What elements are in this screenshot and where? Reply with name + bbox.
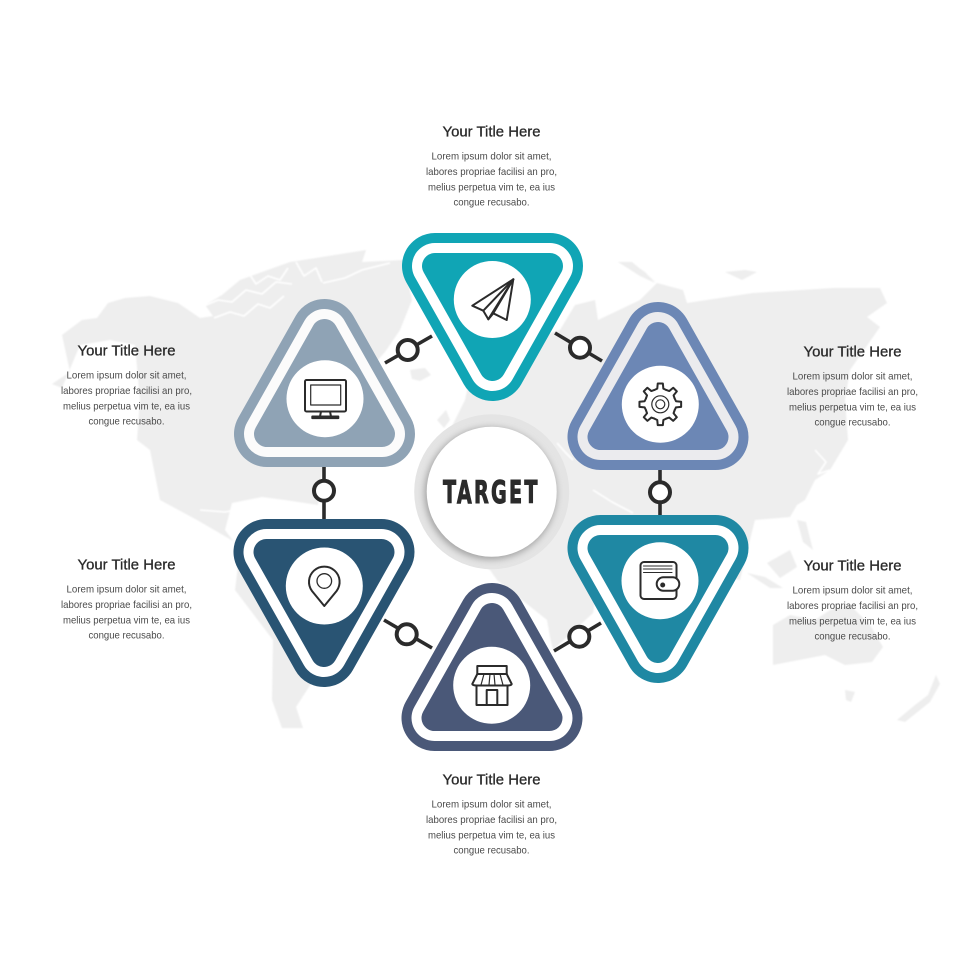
text block: upper left: Lorem ipsum dolor sit amet, bbox=[66, 370, 186, 382]
text block: upper right: Your Title Here bbox=[804, 344, 902, 361]
text block: lower right: melius perpetua vim te, ea ius bbox=[789, 616, 916, 628]
connector: gear to wallet bbox=[650, 468, 670, 516]
text block: bottom: melius perpetua vim te, ea ius bbox=[428, 830, 555, 842]
text block: lower left: congue recusabo. bbox=[88, 630, 164, 642]
text block: bottom: Lorem ipsum dolor sit amet, bbox=[432, 798, 552, 810]
text block: upper right: Lorem ipsum dolor sit amet, bbox=[792, 370, 912, 382]
text block: lower left bbox=[61, 557, 192, 642]
connector: store to wallet bbox=[554, 623, 601, 651]
text block: upper left: labores propriae facilisi an pro, bbox=[61, 385, 192, 397]
text block: top: Your Title Here bbox=[442, 124, 540, 141]
text block: lower right: Your Title Here bbox=[804, 558, 902, 575]
text block: top bbox=[426, 124, 557, 208]
text block: lower left: melius perpetua vim te, ea ius bbox=[63, 614, 190, 626]
icon: location pin bbox=[309, 567, 340, 606]
text block: lower left: labores propriae facilisi an pro, bbox=[61, 599, 192, 611]
text block: upper right bbox=[787, 344, 918, 428]
text block: top: melius perpetua vim te, ea ius bbox=[428, 182, 555, 194]
text block: top: congue recusabo. bbox=[454, 196, 530, 208]
text block: upper right: congue recusabo. bbox=[814, 416, 890, 428]
text block: lower left: Lorem ipsum dolor sit amet, bbox=[66, 584, 186, 596]
text block: upper left: melius perpetua vim te, ea ius bbox=[63, 400, 190, 412]
panel: pin triangle bbox=[266, 548, 382, 654]
text block: lower right: labores propriae facilisi an pro, bbox=[787, 600, 918, 612]
icon: gear bbox=[639, 383, 681, 425]
center label: TARGET bbox=[443, 475, 540, 511]
text block: lower right: Lorem ipsum dolor sit amet, bbox=[792, 584, 912, 596]
connectors bbox=[314, 333, 670, 651]
text block: bottom: congue recusabo. bbox=[454, 844, 530, 856]
text block: upper right: melius perpetua vim te, ea ius bbox=[789, 402, 916, 414]
panel: store triangle bbox=[434, 616, 550, 724]
text block: lower right bbox=[787, 558, 918, 642]
text block: upper right: labores propriae facilisi an pro, bbox=[787, 386, 918, 398]
icon: paper plane bbox=[472, 279, 513, 320]
text block: upper left bbox=[61, 343, 192, 428]
text block: upper left: congue recusabo. bbox=[88, 416, 164, 428]
text block: top: Lorem ipsum dolor sit amet, bbox=[432, 150, 552, 162]
text block: lower left: Your Title Here bbox=[78, 557, 176, 574]
connector: plane to gear bbox=[555, 333, 602, 361]
panel: gear triangle bbox=[600, 335, 716, 443]
text block: lower right: congue recusabo. bbox=[814, 630, 890, 642]
text block: upper left: Your Title Here bbox=[78, 343, 176, 360]
connector: monitor to plane bbox=[385, 336, 432, 363]
panel: plane triangle bbox=[435, 261, 550, 368]
panel: wallet triangle bbox=[600, 542, 716, 650]
connector: monitor to pin bbox=[314, 466, 334, 520]
center target circle bbox=[414, 414, 569, 569]
icon: store bbox=[472, 666, 512, 705]
text block: top: labores propriae facilisi an pro, bbox=[426, 166, 557, 178]
text block: bottom bbox=[426, 772, 557, 856]
text block: bottom: labores propriae facilisi an pro, bbox=[426, 814, 557, 826]
panel: monitor triangle bbox=[267, 332, 382, 437]
icon: monitor bbox=[305, 380, 346, 418]
connector: pin to store bbox=[384, 620, 432, 648]
world map bbox=[52, 250, 940, 728]
icon: wallet bbox=[640, 562, 679, 599]
text block: bottom: Your Title Here bbox=[442, 772, 540, 789]
